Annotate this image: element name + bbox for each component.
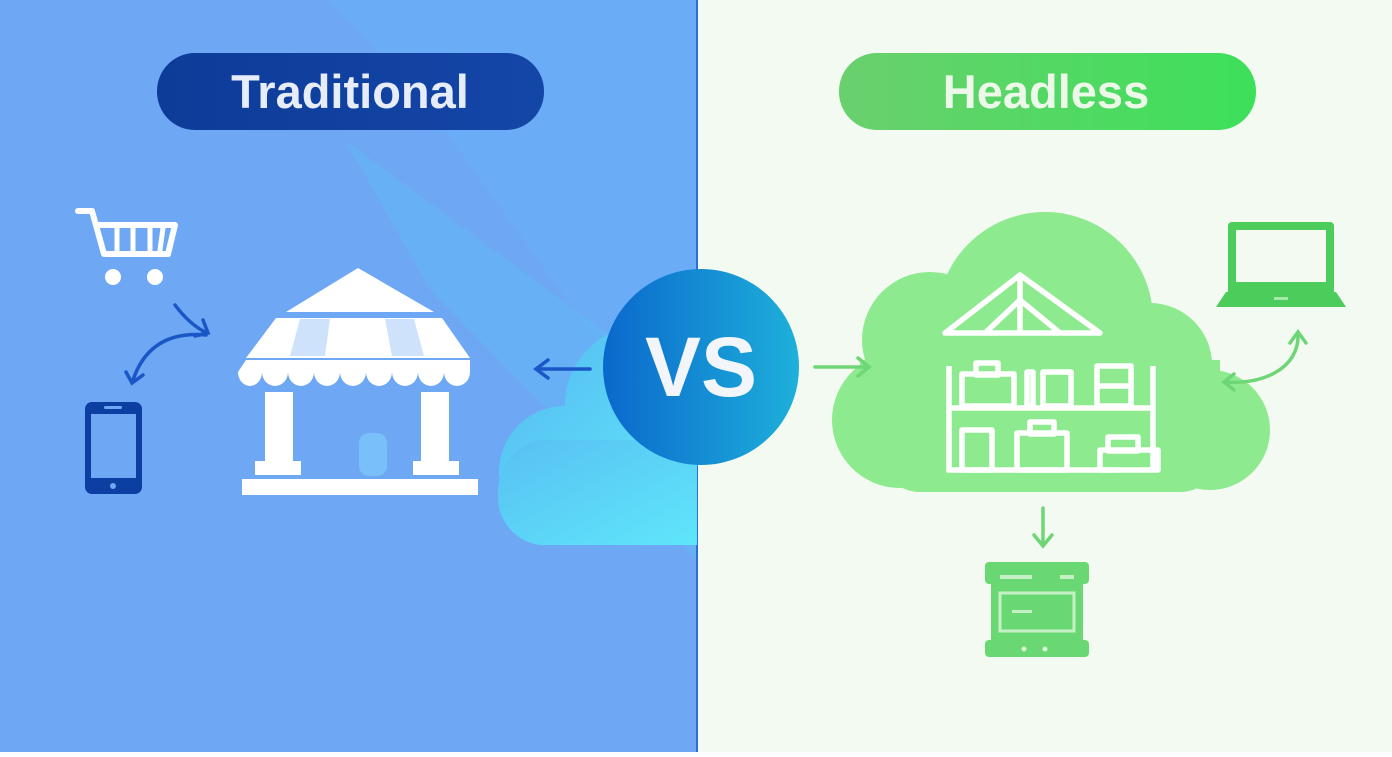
vs badge: [603, 269, 799, 465]
icon: laptop: [1216, 222, 1346, 307]
icon: storefront: [238, 268, 478, 495]
vs badge: VS: [645, 320, 757, 414]
icon: smartphone: [85, 402, 142, 494]
cloud: left decorative: [498, 325, 725, 545]
arrow: cloud to device: [1034, 508, 1052, 546]
icon: warehouse: [945, 275, 1158, 472]
title: Headless: Headless: [943, 65, 1149, 118]
arrow: vs to store: [536, 360, 590, 378]
title: Traditional: [157, 53, 544, 130]
background: left panel: [0, 0, 697, 752]
arrow: vs to cloud: [815, 358, 869, 376]
arrow: cloud to laptop: [1224, 332, 1306, 390]
icon: shopping cart: [78, 211, 175, 285]
title: Traditional: Traditional: [231, 65, 469, 118]
title: Headless: [839, 53, 1256, 130]
arrow: cart to store and phone: [126, 305, 208, 383]
background: right panel: [697, 0, 1392, 752]
cloud: headless commerce backend: [832, 212, 1270, 492]
icon: terminal device: [985, 562, 1089, 657]
